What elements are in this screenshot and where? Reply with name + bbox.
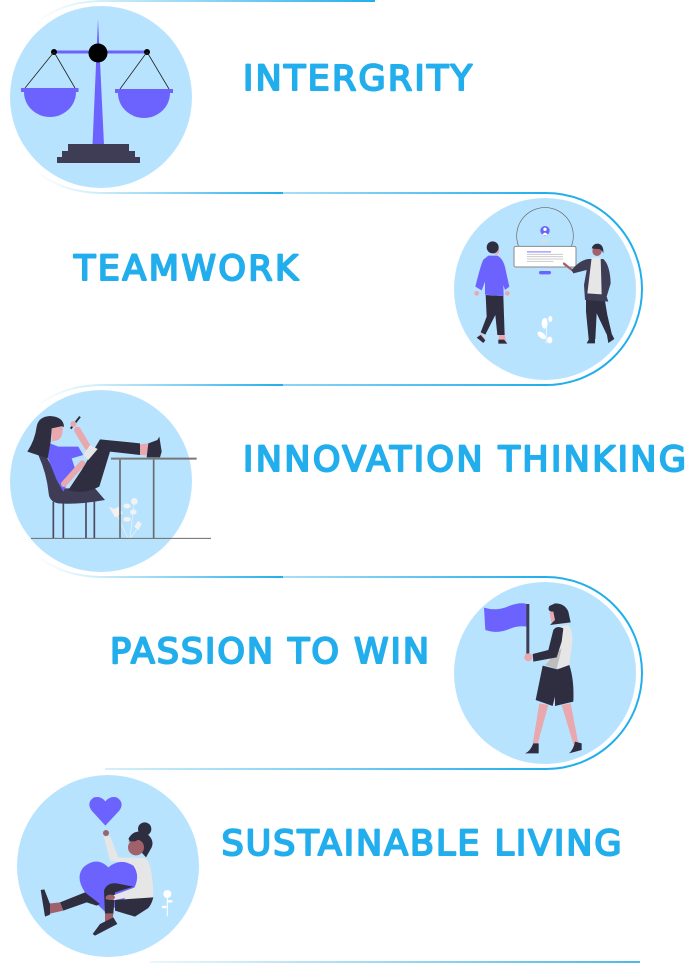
left person [474,241,510,344]
heading: integrity: INTERGRITY [243,59,473,99]
plant [536,316,552,343]
panel: innovation thinking [10,390,686,572]
plant [109,498,142,538]
heading: sustainable living: SUSTAINABLE LIVING [222,824,622,864]
icon: woman hugging a heart [17,775,199,957]
right person [564,244,614,343]
heading: passion to win: PASSION TO WIN [110,632,429,672]
panel: sustainable living [17,775,622,957]
heading: innovation thinking: INNOVATION THINKING [243,440,686,480]
flower [162,890,173,916]
panel: teamwork [73,198,636,380]
icon: woman reclining with feet on desk [10,390,211,572]
heading: teamwork: TEAMWORK [73,249,299,289]
table [111,458,197,460]
woman [27,416,162,492]
icon: woman holding a flag [454,582,636,764]
icon: two people with a screen [454,198,636,380]
icon: balance scale [10,6,192,188]
panel: passion to win [110,582,636,764]
panel: integrity [10,6,473,188]
chair [38,454,105,538]
